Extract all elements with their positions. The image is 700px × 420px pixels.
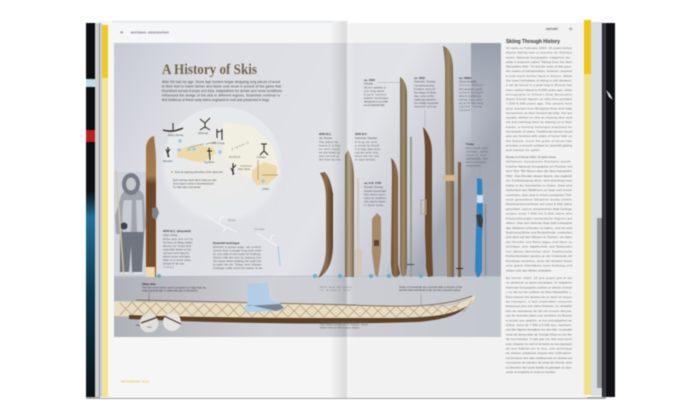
caption: Downhill technique: Downhill technique bbox=[213, 241, 240, 245]
left page header bbox=[120, 30, 169, 34]
ski: 3200 B.C. Kalvtrask bbox=[345, 150, 354, 277]
map legend: Rock art depicting skiers bbox=[175, 171, 201, 174]
French text: pour chasser le cerf et la biche en les épuisant bbox=[506, 342, 572, 346]
ski: 6000 B.C. Vis, Russia bbox=[318, 172, 333, 278]
caption: ca. 1600 Norway: Skiers added to bbox=[364, 86, 386, 90]
English text: the exact birthplace of skiing is still debated, bbox=[506, 78, 572, 82]
English text: tracks, a hunting technique practiced for bbox=[506, 125, 572, 129]
caption: ski notes bbox=[320, 286, 369, 330]
caption: ski notes: in modern use bbox=[320, 289, 351, 292]
caption: 6000 B.C. Vis, Russia: found in a bog bbox=[319, 144, 341, 148]
caption: Altay skin bbox=[142, 282, 206, 319]
caption: Today: responsive. bbox=[466, 164, 482, 168]
English text: Alpine Skiing was to become an Olympic bbox=[506, 51, 572, 55]
caption: ca. 1800 Telemark: the shape of these bbox=[414, 90, 436, 94]
intro text block: flourished across Europe and Asia. Adaptations for terrain and snow conditions bbox=[162, 89, 282, 93]
caption: 6000 B.C. Altay: hunters of Altay today, bbox=[163, 240, 193, 244]
map legend bbox=[171, 171, 224, 189]
French text: beaucoup plus loin dans l'histoire. Le véritable bbox=[506, 304, 572, 308]
caption: 6000 B.C. Altay: today. bbox=[163, 265, 175, 269]
icon: ski binding sketches bbox=[207, 215, 280, 266]
German text: ziehen sich den Winter rückwärts. bbox=[506, 268, 552, 272]
map labels: Vyg Basin bbox=[204, 162, 215, 164]
map labels: Lake Onega bbox=[212, 143, 225, 145]
intro text block: to their feet to travel farther and faster over snow in pursuit of the game that bbox=[162, 84, 281, 88]
map labels: SIBERIA bbox=[231, 141, 251, 151]
map labels: Rodoy, Norway bbox=[168, 134, 184, 137]
caption: A.D. 1700 Norway: used on soldiers bbox=[364, 196, 387, 200]
caption: A.D. 1700 Norway: in deep snow. bbox=[364, 203, 384, 207]
caption: Downhill technique: on one side of the body for braking. bbox=[213, 252, 261, 256]
caption: ca. 1600 Norway: an unmatched ride. bbox=[364, 103, 385, 107]
caption: 6000 B.C. Vis, Russia: was carved at bbox=[319, 154, 339, 158]
English text: Hampshire Hills." To find the roots of skis upon bbox=[506, 65, 571, 69]
French text: de chasse pratiquée depuis des millénaires. bbox=[506, 351, 572, 355]
circular numbered markers bbox=[157, 274, 423, 278]
German text: brachte National Geographic ein Feature mit bbox=[506, 164, 572, 168]
caption: A.D. 1700 Norway: ca. A.D. 1700 bbox=[364, 181, 382, 185]
English text: been carbon-dated to 8,000 years ago, while bbox=[506, 88, 572, 92]
German text bbox=[506, 155, 572, 272]
English text: a look much further back in history. While bbox=[506, 74, 572, 78]
caption: ca. 1890s Sierra Nevada: shoes". bbox=[459, 108, 473, 112]
French text: En février 1924, 15 ans avant que le ski bbox=[506, 276, 572, 280]
caption: 6000 B.C. Vis, Russia: Vis, Russia bbox=[319, 136, 332, 140]
English text: equally skilled on skis at chasing deer and bbox=[506, 116, 572, 120]
German text: geschätzt, und im chinesischen Altai-Gebirge bbox=[506, 207, 572, 211]
English text: the means of transportation, however, required bbox=[506, 69, 572, 73]
caption: ca. 1600 Norway: board lashed bbox=[364, 92, 386, 96]
ski: 6000 B.C. Altay bbox=[146, 136, 159, 277]
caption: ski covered with horsehide: Strips of horsehide are covered with a mixture of fat bbox=[399, 285, 462, 289]
caption: ca. 1890s Sierra Nevada: called "snow bbox=[459, 104, 482, 108]
map labels: RUSSIA bbox=[229, 156, 241, 159]
pole: modern pole bbox=[485, 204, 486, 275]
caption: 6000 B.C. Vis, Russia: so well-made, bbox=[319, 147, 341, 151]
caption: ca. 1800 Telemark: the middle improved bbox=[414, 101, 438, 105]
caption: 3200 B.C. Kalvtrask bbox=[355, 132, 380, 162]
French text: lieu de naissance du ski est encore discuté, bbox=[506, 309, 572, 313]
caption: 6000 B.C. Altay: Wide skis are cut by bbox=[163, 237, 194, 241]
caption: ski notes: allows them to climb steep slopes. bbox=[320, 326, 360, 330]
caption: Downhill technique: Skiers ride the turn by leaning into bbox=[213, 256, 262, 260]
caption: 3200 B.C. Kalvtrask: in a bog, was once bbox=[355, 147, 380, 151]
caption: ski notes: they fasten a hide on the bottom, which bbox=[320, 324, 369, 326]
German text: moor gefundene Skispitze wurde mittels bbox=[506, 197, 572, 201]
globe disc bbox=[161, 107, 283, 229]
caption: ca. 1800 Telemark: Telemark, Norway bbox=[414, 80, 436, 84]
pole: wooden staff bbox=[355, 178, 362, 277]
caption: 6000 B.C. Altay: date to a much older bbox=[163, 258, 191, 262]
intro text block bbox=[162, 80, 282, 102]
intro text block: find evidence of these early skiers engraved in rock and preserved in bogs. bbox=[162, 98, 270, 102]
caption: Downhill technique: the slope while holding the staff low bbox=[213, 259, 261, 263]
land: Altai region bbox=[252, 162, 277, 185]
French text: La structure des skis traditionnels en épicéa est bbox=[506, 356, 572, 360]
caption: 3200 B.C. Kalvtrask: short ski for use bbox=[355, 154, 380, 158]
caption: Today: Today bbox=[466, 142, 474, 146]
French text: Pour trouver les racines de ce sport et moyen bbox=[506, 295, 572, 299]
ski: today blue ski bbox=[475, 178, 483, 277]
caption: 3200 B.C. Kalvtrask: a round tip found bbox=[355, 144, 380, 148]
French text: de son histoire. Il sait que les skis sont bons bbox=[506, 337, 572, 341]
German text: Geburtsort des Skifahrens (er liegt noch immer bbox=[506, 188, 572, 192]
caption: A.D. 1700 Norway bbox=[364, 181, 387, 207]
caption: Downhill technique: to steer the ski. Today, heel release bbox=[213, 262, 262, 266]
English text: provides a smooth surface for downhill gliding bbox=[506, 143, 572, 147]
land: Scandinavia region bbox=[177, 146, 216, 162]
map: globe with ski finds bbox=[161, 107, 283, 229]
icon: pale blue boot bbox=[245, 283, 284, 312]
German text: Hills". Das Wunder dieses Sports, das zugleich bbox=[506, 174, 572, 178]
German text: umstritten, aber eine in einem russischen Torf- bbox=[506, 193, 572, 197]
caption: ca. 1890s Sierra Nevada: skis to California, bbox=[459, 94, 482, 98]
German text: die Hirsche und Rehe jagen und dann zu bbox=[506, 240, 572, 244]
article heading: Skiing Through History bbox=[506, 39, 560, 45]
caption: A.D. 1700 Norway: Double bound skis bbox=[364, 189, 387, 193]
caption: ski notes: Skis and ski poles bbox=[320, 286, 353, 289]
caption: ca. 1890s Sierra Nevada: Norwegian gold bbox=[459, 87, 482, 91]
German text: Fichtenholzskier werden an der Unterseite mit bbox=[506, 254, 572, 258]
caption: ca. 1890s Sierra Nevada bbox=[459, 76, 484, 112]
intro text block: influenced the design of the skis in different regions. Scientists continue to bbox=[162, 94, 280, 98]
map legend: the Altai region and spread. bbox=[173, 186, 201, 189]
English text: event, National Geographic magazine ran bbox=[506, 55, 570, 59]
intro text block: After the last ice age, Stone Age hunters began strapping long pieces of wood bbox=[162, 80, 280, 84]
caption: ca. 1800 Telemark: made use narrow in bbox=[414, 98, 436, 102]
German text: Skifahren olympische Disziplin wurde, bbox=[506, 160, 572, 164]
caption: Today: lightweight, fast bbox=[466, 156, 488, 160]
German text: Zeichnung Elche und Rentierherde, erwischen bbox=[506, 231, 572, 235]
caption: ca. 1890s Sierra Nevada: up to 14 feet long bbox=[459, 101, 484, 105]
French text: de leur habitat sur le dos, une technique bbox=[506, 346, 572, 350]
German text: früher in der Geschichte zu finden. Zwar wird bbox=[506, 183, 572, 187]
French text: tent des figures humaines sur des skis. Le peuple bbox=[506, 328, 572, 332]
German text: verfolgen, eine Jagdtechnik, seit Tausenden bbox=[506, 245, 572, 249]
German text: Bereits im Februar 1924, 15 Jahre bevor bbox=[506, 155, 556, 159]
ski: short wide ski bbox=[372, 213, 381, 277]
French text: la direction des poils facilite la glissade en des- bbox=[506, 365, 572, 369]
right book cover edge bbox=[591, 22, 615, 397]
right column article bbox=[506, 39, 573, 374]
map legend: Some argue it arose in Scandinavia and bbox=[173, 182, 214, 186]
French text: a révélé une spatule, et les pétroglyphes de bbox=[506, 318, 572, 322]
pole: thin grey pole bbox=[407, 137, 414, 277]
German text: das Skilaufen erfunden zu haben, und sie sind bbox=[506, 226, 572, 230]
German text: der Fortbewegung dient, wird allerdings weit bbox=[506, 179, 572, 183]
insets: ski hide detail circles: hide bbox=[147, 326, 152, 329]
ski: ca. 1800 Telemark bbox=[421, 127, 433, 277]
English text: thousands of years. Traditional spruce wood bbox=[506, 130, 572, 134]
caption: Altay skin: travel, prevents slips. It makes skis grip on the ascent. bbox=[142, 288, 198, 292]
caption: Altay skin: Altay skin bbox=[142, 282, 156, 286]
caption: Today: Skis built with bbox=[466, 146, 488, 150]
caption: ski covered with horsehide: and the hide and blood of elk; the ski is bound in place. bbox=[399, 288, 461, 292]
French text: ne devienne un sport olympique, le magazine bbox=[506, 281, 572, 285]
map routes bbox=[190, 142, 278, 180]
map labels: Zalavruga bbox=[198, 132, 209, 135]
blue site markers bbox=[177, 139, 265, 183]
icon: ski binding sketches: Binding bbox=[228, 220, 236, 222]
caption: 3200 B.C. Kalvtrask: Kalvtrask, Sweden bbox=[355, 136, 378, 140]
caption: 6000 B.C. Altay: whose fur-lined skis bbox=[163, 244, 192, 248]
caption: ca. 1600 Norway: designed to provide bbox=[364, 100, 388, 104]
French text: car de récentes dans une tourbière en Russie bbox=[506, 314, 572, 318]
right yellow page-edge strip bbox=[584, 20, 591, 395]
caption: 6000 B.C. Vis, Russia: an elk-head tip bbox=[319, 150, 341, 154]
caption: Today: and extremely bbox=[466, 160, 487, 164]
map labels: Altai, China bbox=[238, 168, 250, 171]
caption: 3200 B.C. Kalvtrask: paired with one bbox=[355, 150, 378, 154]
caption: 6000 B.C. Altay: Altay, China bbox=[163, 233, 178, 237]
gutter shadow bbox=[330, 21, 354, 398]
caption: ca. 1600 Norway bbox=[364, 78, 401, 107]
insets: ski hide detail circles: hair bbox=[136, 324, 140, 327]
caption: ca. 1800 Telemark bbox=[414, 76, 438, 127]
map labels: CHINA bbox=[262, 188, 270, 191]
map legend: Rock carvings depict skiers using one pole. bbox=[173, 179, 217, 182]
German text: zeigen etwa 7.000 bis 5.000 Jahre alte bbox=[506, 212, 572, 216]
caption: A.D. 1700 Norway: like these were bbox=[364, 192, 386, 196]
book: outer shadow and page block bbox=[86, 21, 606, 399]
caption: 6000 B.C. Altay: period of ski use. bbox=[163, 262, 185, 266]
German text: und dann auf den Wiesen zu Steinen, um dann bbox=[506, 235, 572, 239]
caption: 6000 B.C. Altay: resemble those of the bbox=[163, 248, 192, 252]
caption: ca. 1890s Sierra Nevada: miners brought bbox=[459, 90, 483, 94]
English text: 7,000-5,000 years ago. The people here bbox=[506, 102, 572, 106]
caption: ca. 1800 Telemark: downhill turning. bbox=[414, 104, 437, 108]
caption: ca. 1890s Sierra Nevada: ca. 1890s bbox=[459, 76, 472, 80]
caption: ca. 1890s Sierra Nevada: using long skis bbox=[459, 98, 483, 102]
caption: Downhill technique: Without a speed edge, ski control bbox=[213, 245, 261, 249]
caption: Today bbox=[466, 142, 489, 178]
English text: elk and catching them by staying on in their bbox=[506, 120, 572, 124]
map labels: Kuzbass bbox=[257, 157, 267, 159]
caption: Today: carbon, alloy bbox=[466, 150, 489, 154]
caption: ca. 1600 Norway: Norway bbox=[364, 82, 374, 86]
caption: 6000 B.C. Altay: which some scholars bbox=[163, 254, 191, 258]
caption: ca. 1600 Norway: leather footstraps bbox=[364, 96, 389, 100]
English text: depict human figures on skis from perhaps bbox=[506, 97, 572, 101]
caption: ca. 1890s Sierra Nevada: Sierra Nevada, bbox=[459, 80, 477, 84]
right page header bbox=[546, 27, 573, 31]
French text: Chine, vieux de 7 000 à 5 000 ans, représen- bbox=[506, 323, 572, 327]
figure: fur-clad man with skis bbox=[114, 170, 146, 278]
English text: petroglyphs in China's Altai Mountains bbox=[506, 92, 572, 96]
German text: dem Titel "Mit Skiern über die New Hampshire bbox=[506, 169, 572, 173]
caption: ski notes: Skiers from Altai use one long pole and bbox=[320, 320, 369, 324]
left book cover edge bbox=[86, 23, 102, 397]
ski: A.D. 1700 Norway bbox=[391, 158, 400, 277]
German text: eine glatte Gleitfläche beim Aufstieg und bbox=[506, 264, 572, 268]
caption: 3200 B.C. Kalvtrask: A long ski with bbox=[355, 140, 378, 144]
English text: what is featured called "Skiing Over the New bbox=[506, 60, 573, 64]
English text bbox=[506, 46, 573, 152]
French text: recouverte de bandes de peau de cheval, dont bbox=[506, 361, 572, 365]
title: A History of Skis bbox=[162, 62, 257, 78]
caption: 6000 B.C. Vis, Russia: The oldest ski bbox=[319, 140, 338, 144]
left page header: 76 bbox=[120, 30, 124, 34]
caption: ski covered with horsehide bbox=[399, 285, 462, 305]
caption: ca. 1800 Telemark: skis, some of the bbox=[414, 94, 434, 98]
rock art figures bbox=[163, 118, 268, 175]
English text: and traction for uphill. bbox=[506, 148, 540, 152]
insets: ski hide detail circles bbox=[136, 313, 181, 332]
caption: 6000 B.C. Vis, Russia: the front for ice. bbox=[319, 158, 341, 162]
left page header: NATIONAL GEOGRAPHIC bbox=[131, 30, 169, 34]
English text: themselves as their hunted ski-ship, but are bbox=[506, 111, 572, 115]
English text: An early on February 1924, 15 years before bbox=[506, 46, 572, 50]
ski: long net-bound ski bbox=[114, 295, 475, 323]
right page header: HISTORY bbox=[546, 27, 558, 31]
caption: 3200 B.C. Kalvtrask: in open terrain. bbox=[355, 158, 376, 162]
left page footer: NOVEMBER 2013 bbox=[121, 380, 149, 384]
caption: ca. 1600 Norway: one long wood bbox=[364, 89, 384, 93]
map labels bbox=[163, 132, 270, 191]
German text: Rosshaar versehen, denn die Struktur bietet bbox=[506, 259, 572, 263]
French text: « Le ski sur les collines du New Hampshire ». bbox=[506, 290, 572, 294]
panel: illustration background bbox=[114, 43, 501, 337]
caption: ca. 1800 Telemark: Complementing bbox=[414, 84, 434, 88]
French text: de transport, il faut cependant remonter bbox=[506, 300, 572, 304]
caption: 3200 B.C. Kalvtrask: 3200 B.C. bbox=[355, 132, 368, 136]
caption: ca. 1800 Telemark: ca. 1800 bbox=[414, 76, 425, 80]
caption: 6000 B.C. Vis, Russia: 6000 B.C. bbox=[319, 132, 332, 136]
left yellow page-edge strip bbox=[102, 25, 108, 397]
English text: were relevant from Mongolia three and wide bbox=[506, 106, 572, 110]
caption: 6000 B.C. Altay bbox=[163, 229, 194, 269]
French text: local dit descendre de Gengis Khan et est fier bbox=[506, 332, 572, 336]
English text: a ski tip found in a peat bog in Russia has bbox=[506, 83, 572, 87]
French text: cente et empêche le recul en montée. bbox=[506, 370, 556, 374]
caption: ca. 1890s Sierra Nevada: United States bbox=[459, 83, 484, 87]
German text: Radiokarbonmethode auf etwa 8.000 Jahre bbox=[506, 202, 572, 206]
caption: Downhill technique: bindings make turns far easier to do. bbox=[213, 266, 263, 270]
icon: ski binding sketches: Foot strap bbox=[254, 228, 265, 231]
caption: ca. 1800 Telemark: binders around bbox=[414, 87, 436, 91]
French text: National Geographic publia un article intitulé bbox=[506, 285, 572, 289]
caption: ca. 1600 Norway: ca. 1600 bbox=[364, 78, 375, 82]
right page header: 79 bbox=[569, 27, 573, 31]
caption: A.D. 1700 Norway: Rondal, Norway bbox=[364, 185, 384, 189]
German text: von Jahren überliefert wird. Traditionelle bbox=[506, 249, 572, 253]
map legend: Sites of the oldest skis bbox=[200, 171, 224, 174]
caption: 6000 B.C. Vis, Russia bbox=[319, 132, 341, 162]
caption: Downhill technique: comes from a single long pole used bbox=[213, 248, 262, 252]
caption: 6000 B.C. Altay: 6000 B.C. (disputed) bbox=[163, 229, 191, 233]
land: Siberia wash bbox=[223, 122, 281, 184]
caption: Downhill technique bbox=[213, 241, 263, 270]
ski: ca. 1600 Norway bbox=[400, 77, 407, 277]
English text: skis are finished with strips of horse hide on bbox=[506, 134, 572, 138]
German text: Skiern. Das dort lebende Altai-Volk behauptet bbox=[506, 221, 572, 225]
pole: brown pole bbox=[456, 162, 463, 277]
caption: A.D. 1700 Norway: who had to travel bbox=[364, 200, 385, 204]
map labels: Bohuslan bbox=[163, 161, 173, 163]
caption: Today: layers are bbox=[466, 153, 486, 157]
French text bbox=[506, 276, 572, 374]
caption: Altay skin: The skin of the horse used to prepare is a ridge that, for bbox=[142, 286, 206, 290]
German text: Felszeichnungen menschliche Figuren auf bbox=[506, 216, 572, 220]
caption: 6000 B.C. Altay: carved rock figures bbox=[163, 251, 190, 255]
ski: ca. 1890s Sierra Nevada bbox=[443, 46, 456, 277]
English text: the bottom, since the grain of horse hair bbox=[506, 139, 572, 143]
